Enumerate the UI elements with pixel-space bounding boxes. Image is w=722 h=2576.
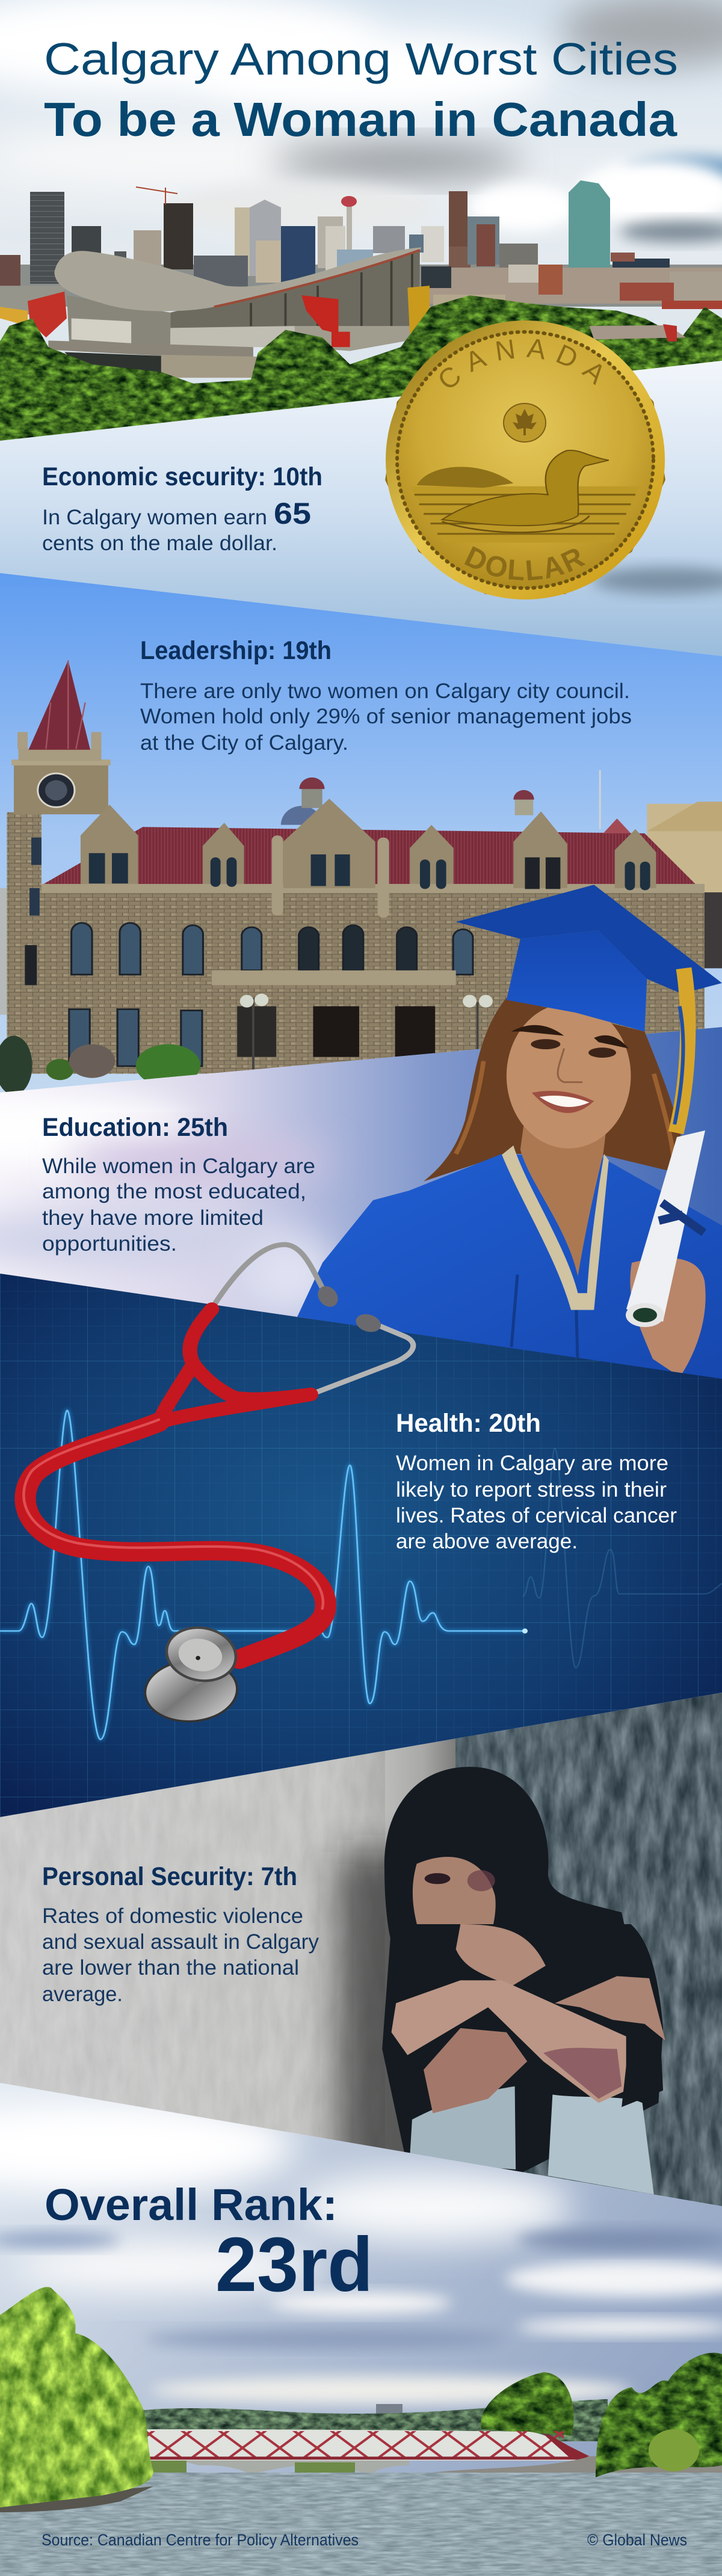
ECG heartbeat line: [0, 1411, 722, 1740]
text block: economic security: [42, 462, 322, 555]
panel: personal security: [0, 1690, 722, 2225]
heading: overall rank: Overall Rank:: [45, 2180, 338, 2230]
body: education: opportunities.: [42, 1232, 177, 1256]
body, arms and legs: [382, 1924, 665, 2194]
text block: personal security: [42, 1862, 319, 2006]
distant treeline: [132, 2372, 608, 2441]
body: education: While women in Calgary are: [42, 1155, 315, 1178]
illustration: red stethoscope: [23, 1245, 413, 1725]
hair: [424, 998, 686, 1182]
heading: personal security: Personal Security: 7th: [42, 1862, 297, 1891]
title line two: To be a Woman in Canada: [44, 93, 677, 146]
source credit: Source: Canadian Centre for Policy Alternatives: [42, 2531, 359, 2549]
icon: one-dollar loonie coin: [385, 320, 665, 600]
heading: education: Education: 25th: [42, 1113, 228, 1142]
Peace Bridge: [143, 2429, 590, 2474]
body: personal security: Rates of domestic violence: [42, 1904, 303, 1928]
coin text: CANADA: CANADA: [440, 339, 602, 387]
illustration: loon on lake: [410, 450, 640, 542]
neck and collar: [502, 1116, 609, 1310]
heading: overall rank: 23rd: [215, 2222, 373, 2308]
coin text: DOLLAR: DOLLAR: [464, 546, 586, 581]
body: health: are above average.: [396, 1530, 578, 1553]
trees left: [0, 2287, 153, 2507]
panel: overall rank landscape: [0, 2081, 722, 2576]
body: leadership: There are only two women on Calgary city council.: [140, 679, 630, 703]
heading: leadership: Leadership: 19th: [140, 636, 332, 665]
body: health: Women in Calgary are more: [396, 1452, 668, 1475]
skyline buildings: [0, 180, 722, 309]
text block: health: [396, 1409, 677, 1553]
panel: education: [0, 1027, 722, 1321]
torso and hair: [384, 1767, 631, 1958]
Saddledome arena: [0, 247, 430, 378]
body: leadership: at the City of Calgary.: [140, 731, 348, 755]
illustration: seated woman with crossed arms: [382, 1767, 665, 2194]
text block: leadership: [140, 636, 632, 755]
water: [0, 2473, 722, 2576]
tree foliage: [0, 295, 722, 445]
clouds: [0, 2099, 722, 2405]
body: leadership: [140, 679, 632, 755]
body: personal security: [42, 1904, 319, 2006]
body: personal security: average.: [42, 1983, 123, 2006]
clouds: [0, 0, 722, 253]
icon: maple leaf on coin: [504, 403, 546, 442]
body: education: they have more limited: [42, 1206, 264, 1230]
Global News credit: © Global News: [587, 2531, 687, 2549]
text: education: [42, 1113, 315, 1256]
panel: header photo of Calgary skyline: [0, 0, 722, 445]
body: economic security: [42, 497, 311, 555]
body: economic security: cents on the male dollar.: [42, 532, 277, 555]
City Hall building illustration: [0, 660, 722, 1095]
heading: economic security: Economic security: 10th: [42, 462, 322, 491]
panel: leadership sky: [0, 571, 722, 1095]
mortarboard cap: [456, 885, 722, 1133]
body: personal security: are lower than the national: [42, 1956, 299, 1980]
illustration: graduate with cap and scroll: [297, 885, 722, 1381]
panel: economic security: [0, 361, 722, 656]
diploma scroll and hand: [626, 1130, 706, 1377]
body: education: [42, 1155, 315, 1256]
body: health: [396, 1452, 677, 1553]
body: health: lives. Rates of cervical cancer: [396, 1504, 677, 1527]
shoreline rocks right: [400, 2450, 722, 2480]
body: economic security: In Calgary women earn: [42, 506, 267, 529]
body: education: among the most educated,: [42, 1180, 306, 1203]
panel: health: [0, 1269, 722, 1819]
rocks on left shore: [0, 2486, 153, 2512]
body: personal security: and sexual assault in Calgary: [42, 1930, 319, 1954]
trees right: [596, 2353, 722, 2477]
body: leadership: Women hold only 29% of senior management jobs: [140, 705, 632, 728]
body: economic security: 65: [274, 497, 311, 530]
title line one: Calgary Among Worst Cities: [44, 34, 678, 84]
face: [507, 1004, 631, 1148]
heading: health: Health: 20th: [396, 1409, 541, 1438]
title: [44, 34, 678, 146]
body: health: likely to report stress in their: [396, 1478, 667, 1501]
arched windows: [69, 923, 473, 1066]
gown: [297, 1154, 722, 1381]
heading: overall rank: [45, 2180, 373, 2308]
